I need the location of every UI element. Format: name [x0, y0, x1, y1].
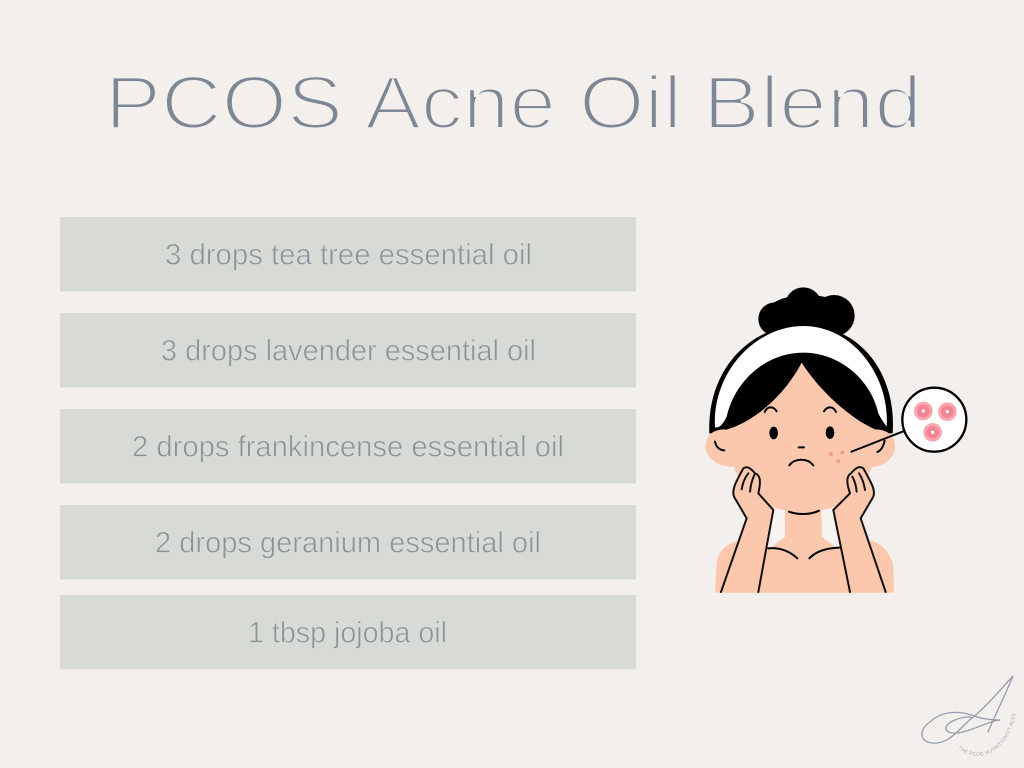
- ingredient row 5: 1 tbsp jojoba oil: [248, 616, 447, 650]
- title: Acne: [365, 60, 556, 144]
- fringe: [725, 353, 875, 430]
- ingredient row 2: 3 drops lavender essential oil: [161, 334, 536, 368]
- acne spots: [829, 450, 844, 463]
- facial features: [715, 407, 885, 558]
- ingredient row 5: [60, 595, 636, 670]
- title: [105, 60, 922, 144]
- shoulders: [715, 510, 894, 593]
- title: Blend: [703, 60, 922, 144]
- hair back: [709, 325, 893, 433]
- title: Oil: [579, 60, 682, 144]
- ingredient row 3: 2 drops frankincense essential oil: [132, 430, 564, 464]
- title: PCOS: [105, 60, 343, 144]
- hair bun: [758, 287, 855, 338]
- icon: woman with acne: [706, 287, 966, 593]
- neck gaps: [772, 510, 835, 543]
- ingredient row 1: [60, 217, 636, 292]
- headband: [715, 326, 887, 427]
- logo caption: THE PCOS NUTRITIONIST ALYSSA: [959, 714, 1016, 756]
- ingredient row 2: [60, 313, 636, 388]
- ingredient row 1: 3 drops tea tree essential oil: [165, 238, 532, 272]
- panel: ingredient list: [60, 217, 636, 670]
- pimples: [914, 402, 957, 442]
- ingredient row 4: [60, 505, 636, 580]
- ingredient row 4: 2 drops geranium essential oil: [155, 526, 541, 560]
- right hand and arm: [833, 467, 886, 593]
- left hand and arm: [721, 467, 773, 593]
- ingredient row 3: [60, 409, 636, 484]
- magnifier callout: [851, 388, 966, 452]
- face and ears: [706, 357, 895, 512]
- logo script letter A: [922, 676, 1013, 743]
